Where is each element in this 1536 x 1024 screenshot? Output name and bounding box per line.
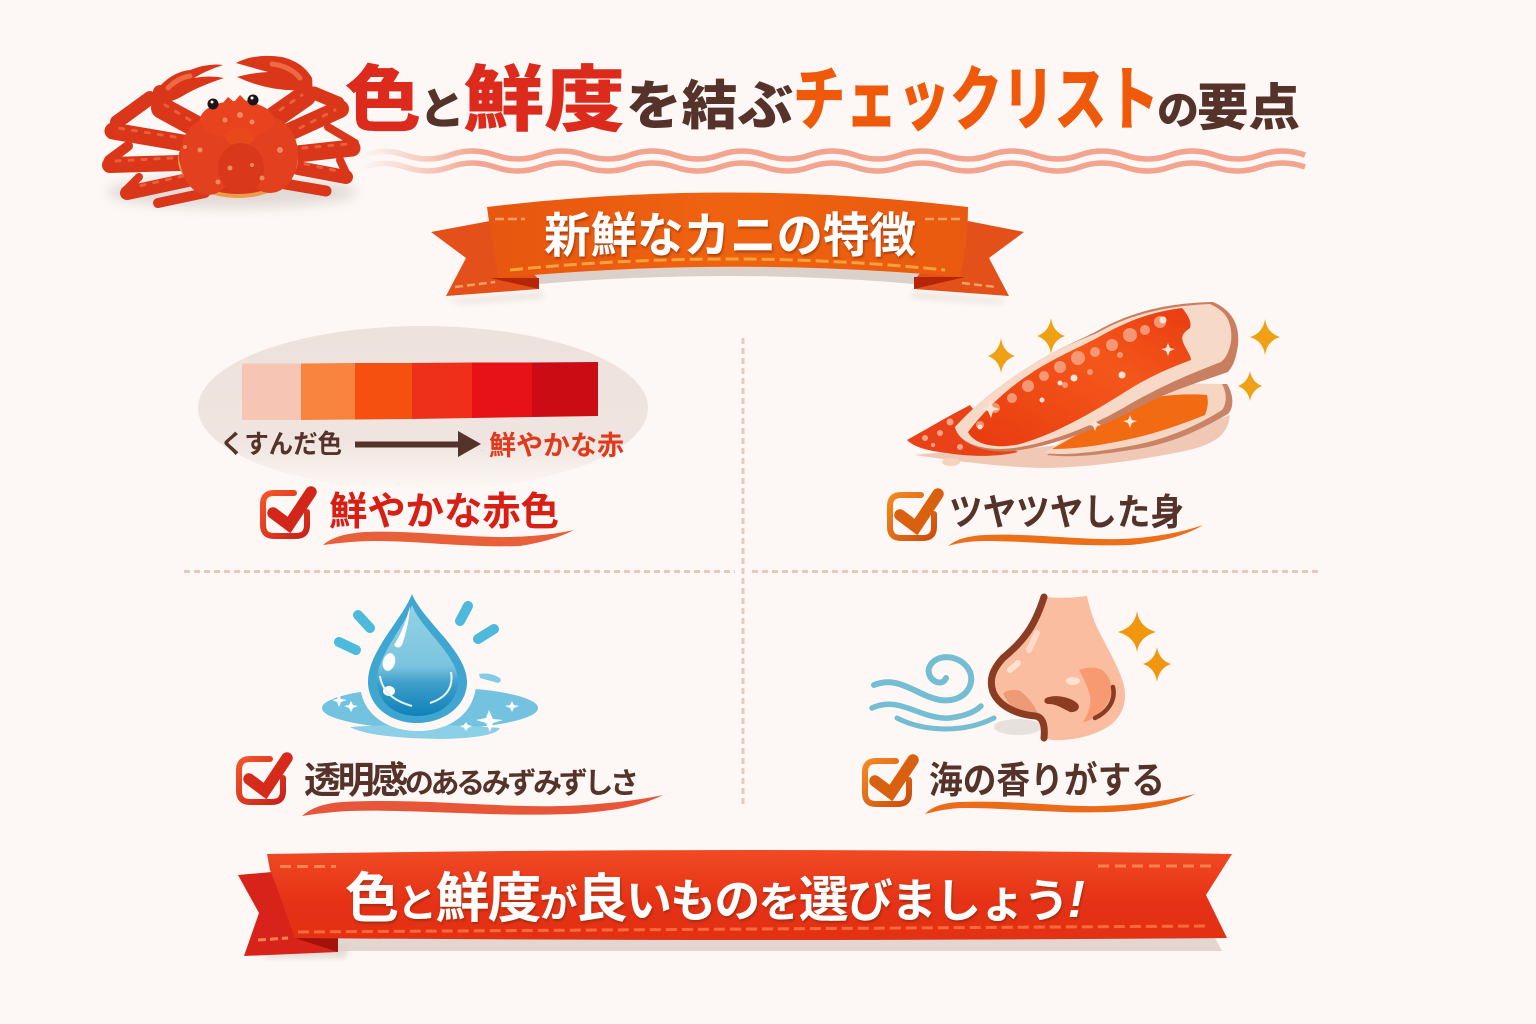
brush underline [323, 530, 574, 546]
heading: 透明感のあるみずみずしさ [304, 760, 639, 801]
icon: sparkles [1118, 611, 1171, 682]
panel: translucent juiciness [239, 586, 663, 816]
icon: crab leg meat [907, 302, 1238, 468]
colour swatches [242, 362, 598, 420]
icon: checkbox [263, 492, 311, 536]
title: と [419, 85, 465, 134]
heading: ツヤツヤした身 [949, 492, 1184, 533]
heading: 鮮やかな赤色 [329, 491, 559, 534]
icon: sparkles [988, 318, 1280, 401]
label: dull colour: くすんだ色 [220, 429, 342, 459]
title: 色 [345, 61, 421, 141]
title: チェックリスト [793, 61, 1159, 139]
dashed dividers [184, 338, 1320, 805]
icon: water drop [322, 586, 538, 739]
banner: 新鮮なカニの特徴 [431, 192, 1024, 304]
title: 鮮度 [463, 61, 625, 141]
heading: 海の香りがする [929, 760, 1165, 801]
arrow [355, 431, 481, 457]
panel: smell of the sea [865, 596, 1195, 814]
title: を結ぶ [626, 77, 793, 136]
wavy title underline [360, 151, 1305, 171]
icon: checkbox [239, 758, 287, 802]
banner text: 新鮮なカニの特徴 [544, 210, 916, 263]
banner: 色と鮮度が良いものを選びましょう! [238, 850, 1232, 958]
icon: nose with breeze [872, 596, 1125, 740]
brush underline [302, 795, 663, 816]
title: 要点 [1197, 80, 1300, 136]
brush underline [925, 794, 1195, 814]
brush underline [948, 525, 1203, 546]
colour scale background oval [198, 326, 648, 490]
panel: vivid red colour [198, 326, 648, 546]
title: の [1157, 89, 1199, 133]
panel: glossy meat [890, 302, 1280, 546]
label: vivid red: 鮮やかな赤 [489, 431, 624, 461]
icon: red crab [107, 56, 357, 208]
icon: checkbox [865, 760, 913, 804]
icon: checkbox [890, 494, 938, 538]
banner text: 色と鮮度が良いものを選びましょう! [345, 869, 1085, 929]
title [345, 61, 1300, 141]
